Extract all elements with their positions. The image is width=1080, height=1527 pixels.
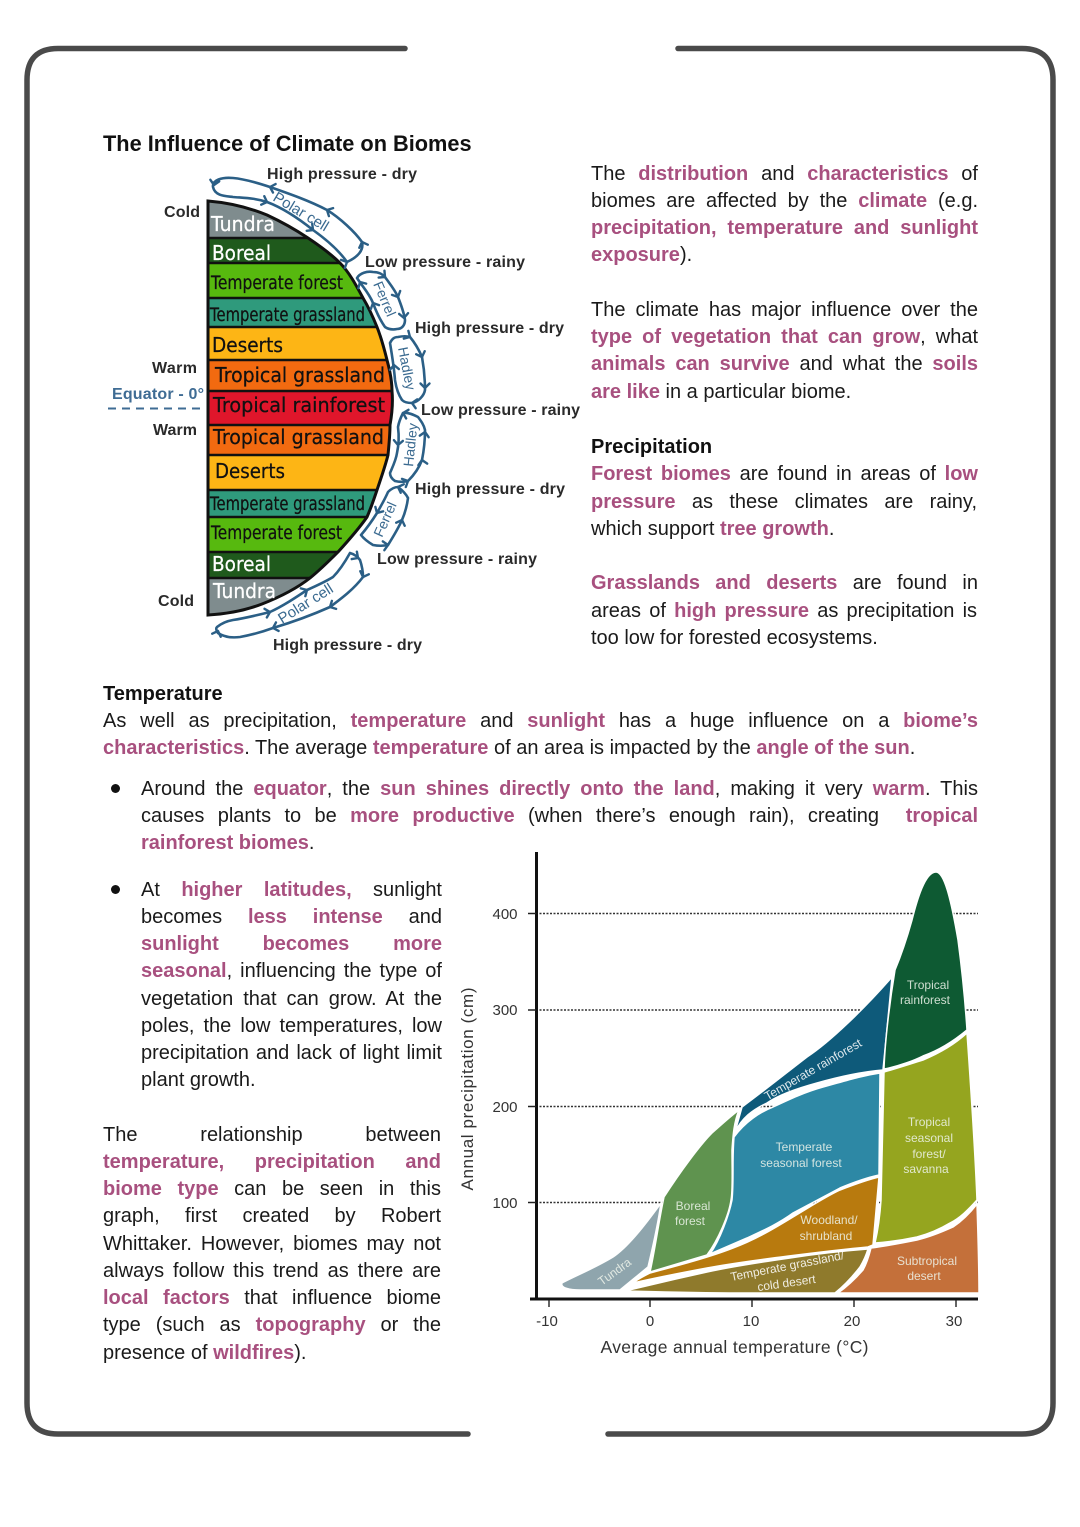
diagram: biomes by latitude with atmospheric circulation cells: Warm	[152, 360, 197, 377]
heading and text: precipitation	[591, 436, 978, 649]
region labels: forest/	[912, 1147, 946, 1161]
text: Whittaker relationship	[103, 1124, 441, 1364]
text: Whittaker relationship: always follow this trend as there are	[103, 1260, 441, 1282]
region labels: Tropical	[908, 1115, 950, 1129]
heading and text: precipitation: Precipitation	[591, 436, 712, 458]
biome band labels: Boreal	[212, 241, 271, 265]
axis numbers: 30	[946, 1313, 962, 1330]
region labels: Subtropical	[897, 1254, 957, 1268]
region labels: Tropical	[907, 978, 949, 992]
bullet: higher latitudes: sunlight becomes more	[141, 933, 442, 955]
biome band labels: Temperate forest	[210, 273, 343, 294]
heading and text: temperature: characteristics. The average temperature of an area is impacted by the angle of the sun.	[103, 737, 915, 759]
axis numbers: 10	[743, 1313, 759, 1330]
heading and text: precipitation: Forest biomes are found in areas of low	[591, 463, 978, 485]
diagram: biomes by latitude with atmospheric circulation cells: High pressure - dry	[267, 166, 417, 183]
circulation cells	[210, 178, 430, 637]
diagram: biomes by latitude with atmospheric circulation cells: Low pressure - rainy	[421, 402, 580, 419]
axis numbers: 400	[492, 906, 518, 923]
diagram: biomes by latitude with atmospheric circulation cells: Ferrel	[370, 499, 400, 539]
bullet: equator: Around the equator, the sun shines directly onto the land, making it very warm. This	[141, 778, 978, 800]
text: climate intro: biomes are affected by the climate (e.g.	[591, 190, 978, 212]
bullet: higher latitudes: vegetation that can grow. At the	[141, 988, 442, 1010]
text: Whittaker relationship: biome type can be seen in this	[103, 1178, 441, 1200]
biome band labels: Deserts	[212, 333, 283, 357]
text: Whittaker relationship: type (such as topography or the	[103, 1314, 441, 1336]
bullet: higher latitudes: seasonal, influencing the type of	[141, 960, 442, 982]
biome band labels: Tropical rainforest	[212, 393, 385, 417]
cell labels: Polar cell	[270, 189, 332, 235]
axis numbers: 20	[844, 1313, 860, 1330]
axis titles: Annual precipitation (cm)	[458, 988, 477, 1190]
region labels: cold desert	[756, 1272, 817, 1294]
diagram: biomes by latitude with atmospheric circulation cells: Low pressure - rainy	[377, 551, 537, 568]
diagram: biomes by latitude with atmospheric circulation cells: Hadley	[400, 422, 421, 467]
diagram: biomes by latitude with atmospheric circulation cells: Hadley	[395, 346, 419, 391]
axis numbers	[492, 906, 962, 1330]
bullet: higher latitudes	[111, 878, 442, 1091]
text: Whittaker relationship: graph, first created by Robert	[103, 1205, 441, 1227]
heading and text: precipitation: areas of high pressure as precipitation is	[591, 600, 977, 622]
diagram: biomes by latitude with atmospheric circulation cells: Cold	[158, 593, 194, 610]
heading and text: precipitation: too low for forested ecosystems.	[591, 627, 878, 649]
axis numbers: 0	[646, 1313, 654, 1330]
bullet: higher latitudes: At higher latitudes, sunlight	[141, 878, 442, 900]
biome band labels: Tundra	[212, 579, 276, 603]
region labels: forest	[675, 1214, 706, 1228]
biome band labels: Boreal	[212, 552, 271, 576]
bullet: higher latitudes: precipitation and lack of light limit	[141, 1042, 442, 1064]
region labels: Tundra	[595, 1255, 634, 1288]
text: climate intro: animals can survive and what the soils	[591, 353, 978, 375]
diagram: biomes by latitude with atmospheric circulation cells: Warm	[153, 422, 197, 439]
text: climate intro: type of vegetation that can grow, what	[591, 326, 978, 348]
region labels: seasonal	[905, 1131, 953, 1145]
diagram: biomes by latitude with atmospheric circulation cells: Polar cell	[275, 580, 336, 627]
heading and text: temperature: Temperature	[103, 682, 223, 704]
biome regions	[562, 872, 979, 1293]
region labels: desert	[907, 1269, 941, 1283]
text: climate intro: exposure).	[591, 244, 692, 266]
biome band labels: Tropical grassland	[214, 363, 385, 387]
biome band labels	[209, 212, 385, 603]
bullet: higher latitudes: becomes less intense and	[141, 906, 442, 928]
axis numbers: -10	[536, 1313, 558, 1330]
heading and text: precipitation: Grasslands and deserts are found in	[591, 572, 978, 594]
text: climate intro: precipitation, temperature and sunlight	[591, 217, 978, 239]
biome band labels: Deserts	[215, 459, 285, 483]
diagram: biomes by latitude with atmospheric circulation cells: Equator - 0°	[112, 386, 204, 403]
climate labels: Cold	[164, 204, 200, 221]
title: The Influence of Climate on Biomes	[103, 131, 472, 156]
bullet: equator: rainforest biomes.	[141, 832, 314, 854]
region labels: Boreal	[676, 1199, 710, 1213]
text: Whittaker relationship: local factors that influence biome	[103, 1287, 441, 1309]
region labels: Temperate grassland/	[729, 1248, 846, 1284]
chart: Whittaker biome diagram: Average annual temperature (°C)	[600, 1337, 868, 1357]
region labels: Temperate	[776, 1140, 833, 1154]
text: climate intro: The climate has major influence over the	[591, 299, 978, 321]
heading and text: precipitation: which support tree growth.	[591, 518, 834, 540]
diagram: biomes by latitude with atmospheric circulation cells	[108, 168, 580, 654]
biome band labels: Temperate forest	[210, 523, 342, 544]
heading and text: temperature	[103, 682, 978, 759]
text: climate intro: The distribution and characteristics of	[591, 162, 978, 184]
heading and text: temperature: As well as precipitation, temperature and sunlight has a huge influence on a biome’s	[103, 710, 978, 732]
axis numbers: 300	[492, 1002, 518, 1019]
heading and text: precipitation: pressure as these climates are rainy,	[591, 490, 977, 512]
diagram: biomes by latitude with atmospheric circulation cells: High pressure - dry	[415, 481, 565, 498]
gridlines	[536, 914, 978, 1202]
region labels: Woodland/	[800, 1213, 858, 1227]
biome bands	[208, 200, 398, 616]
diagram: biomes by latitude with atmospheric circulation cells: Ferrel	[370, 279, 399, 319]
region labels: seasonal forest	[760, 1156, 842, 1170]
text: Whittaker relationship: presence of wildfires).	[103, 1342, 306, 1364]
axis numbers: 100	[492, 1195, 518, 1212]
region labels: savanna	[903, 1162, 949, 1176]
biome band labels: Tropical grassland	[212, 425, 384, 449]
axes	[530, 852, 978, 1300]
text: climate intro	[591, 162, 978, 402]
biome band labels: Tundra	[210, 212, 275, 236]
text: Whittaker relationship: The relationship between	[103, 1124, 441, 1146]
bullet: equator	[111, 778, 978, 854]
text: Whittaker relationship: temperature, precipitation and	[103, 1151, 441, 1173]
text: climate intro: are like in a particular biome.	[591, 380, 851, 402]
axis numbers: 200	[492, 1099, 518, 1116]
text: Whittaker relationship: Whittaker. However, biomes may not	[103, 1232, 441, 1254]
region labels: shrubland	[800, 1229, 852, 1243]
biome band labels: Temperate grassland	[209, 494, 365, 515]
diagram: biomes by latitude with atmospheric circulation cells: Low pressure - rainy	[365, 254, 525, 271]
region labels: rainforest	[900, 993, 951, 1007]
bullet: higher latitudes: poles, the low temperatures, low	[141, 1015, 442, 1037]
diagram: biomes by latitude with atmospheric circulation cells: High pressure - dry	[273, 637, 422, 654]
bullet: higher latitudes: plant growth.	[141, 1069, 256, 1091]
bullet: equator: causes plants to be more productive (when there’s enough rain), creating tropical	[141, 805, 978, 827]
region labels: Temperate rainforest	[762, 1036, 865, 1103]
diagram: biomes by latitude with atmospheric circulation cells: High pressure - dry	[415, 320, 564, 337]
region labels	[595, 978, 957, 1294]
biome band labels: Temperate grassland	[209, 305, 365, 326]
